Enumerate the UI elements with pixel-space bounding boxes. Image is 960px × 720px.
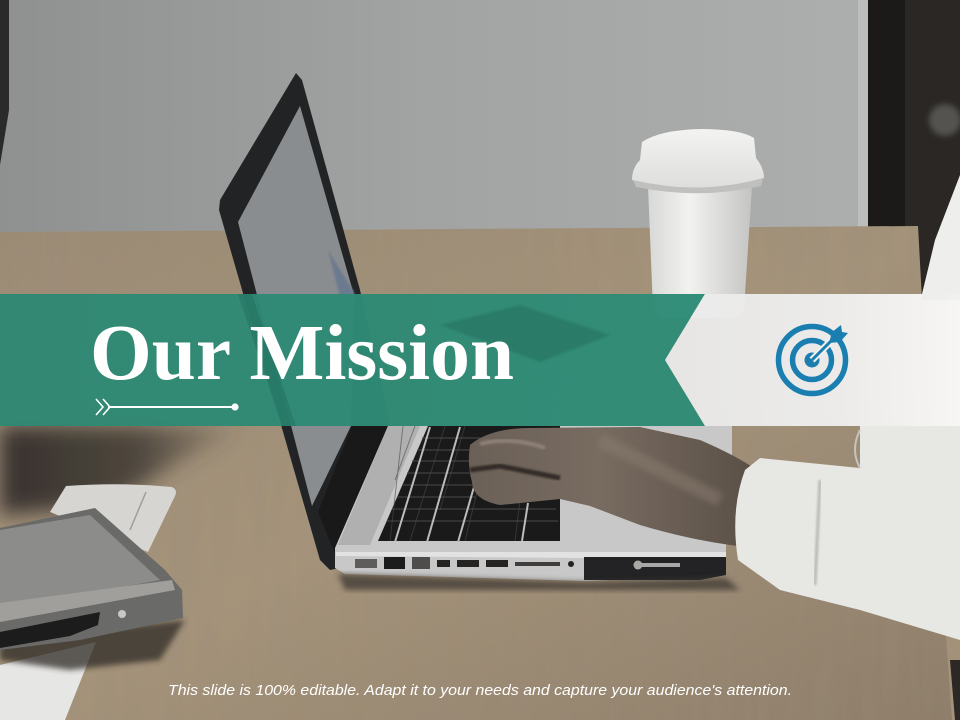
white icon panel bbox=[665, 294, 960, 426]
dark hinge strip bbox=[584, 557, 726, 580]
phone bbox=[0, 642, 96, 720]
wooden table bbox=[0, 226, 952, 720]
icon: target with arrow bbox=[778, 325, 848, 394]
device shadow bbox=[0, 620, 185, 670]
wall bbox=[0, 0, 960, 240]
dark doorway bbox=[858, 0, 960, 300]
shirt sleeve bbox=[735, 175, 960, 640]
arrow line decoration bbox=[96, 399, 239, 415]
dark object at left edge bbox=[0, 0, 9, 165]
far-right dark floor bbox=[950, 660, 960, 720]
side ports bbox=[355, 557, 574, 569]
title: Our Mission bbox=[90, 310, 514, 397]
tablet device bbox=[0, 508, 183, 650]
wood grain bbox=[0, 226, 960, 720]
faint laptop lid seen through band bbox=[238, 294, 296, 426]
banner: teal title band bbox=[0, 294, 705, 426]
footer caption: This slide is 100% editable. Adapt it to your needs and capture your audience's attention. bbox=[168, 682, 792, 699]
laptop lid bbox=[219, 73, 392, 570]
typing hand bbox=[469, 427, 757, 546]
faint tablet reflection in band bbox=[440, 305, 610, 362]
coffee cup bbox=[632, 129, 764, 318]
wall plug bbox=[50, 484, 176, 552]
laptop shadow bbox=[338, 574, 740, 590]
keyboard bbox=[378, 426, 560, 542]
table shadow at left bbox=[0, 426, 250, 515]
laptop base bbox=[335, 426, 740, 590]
